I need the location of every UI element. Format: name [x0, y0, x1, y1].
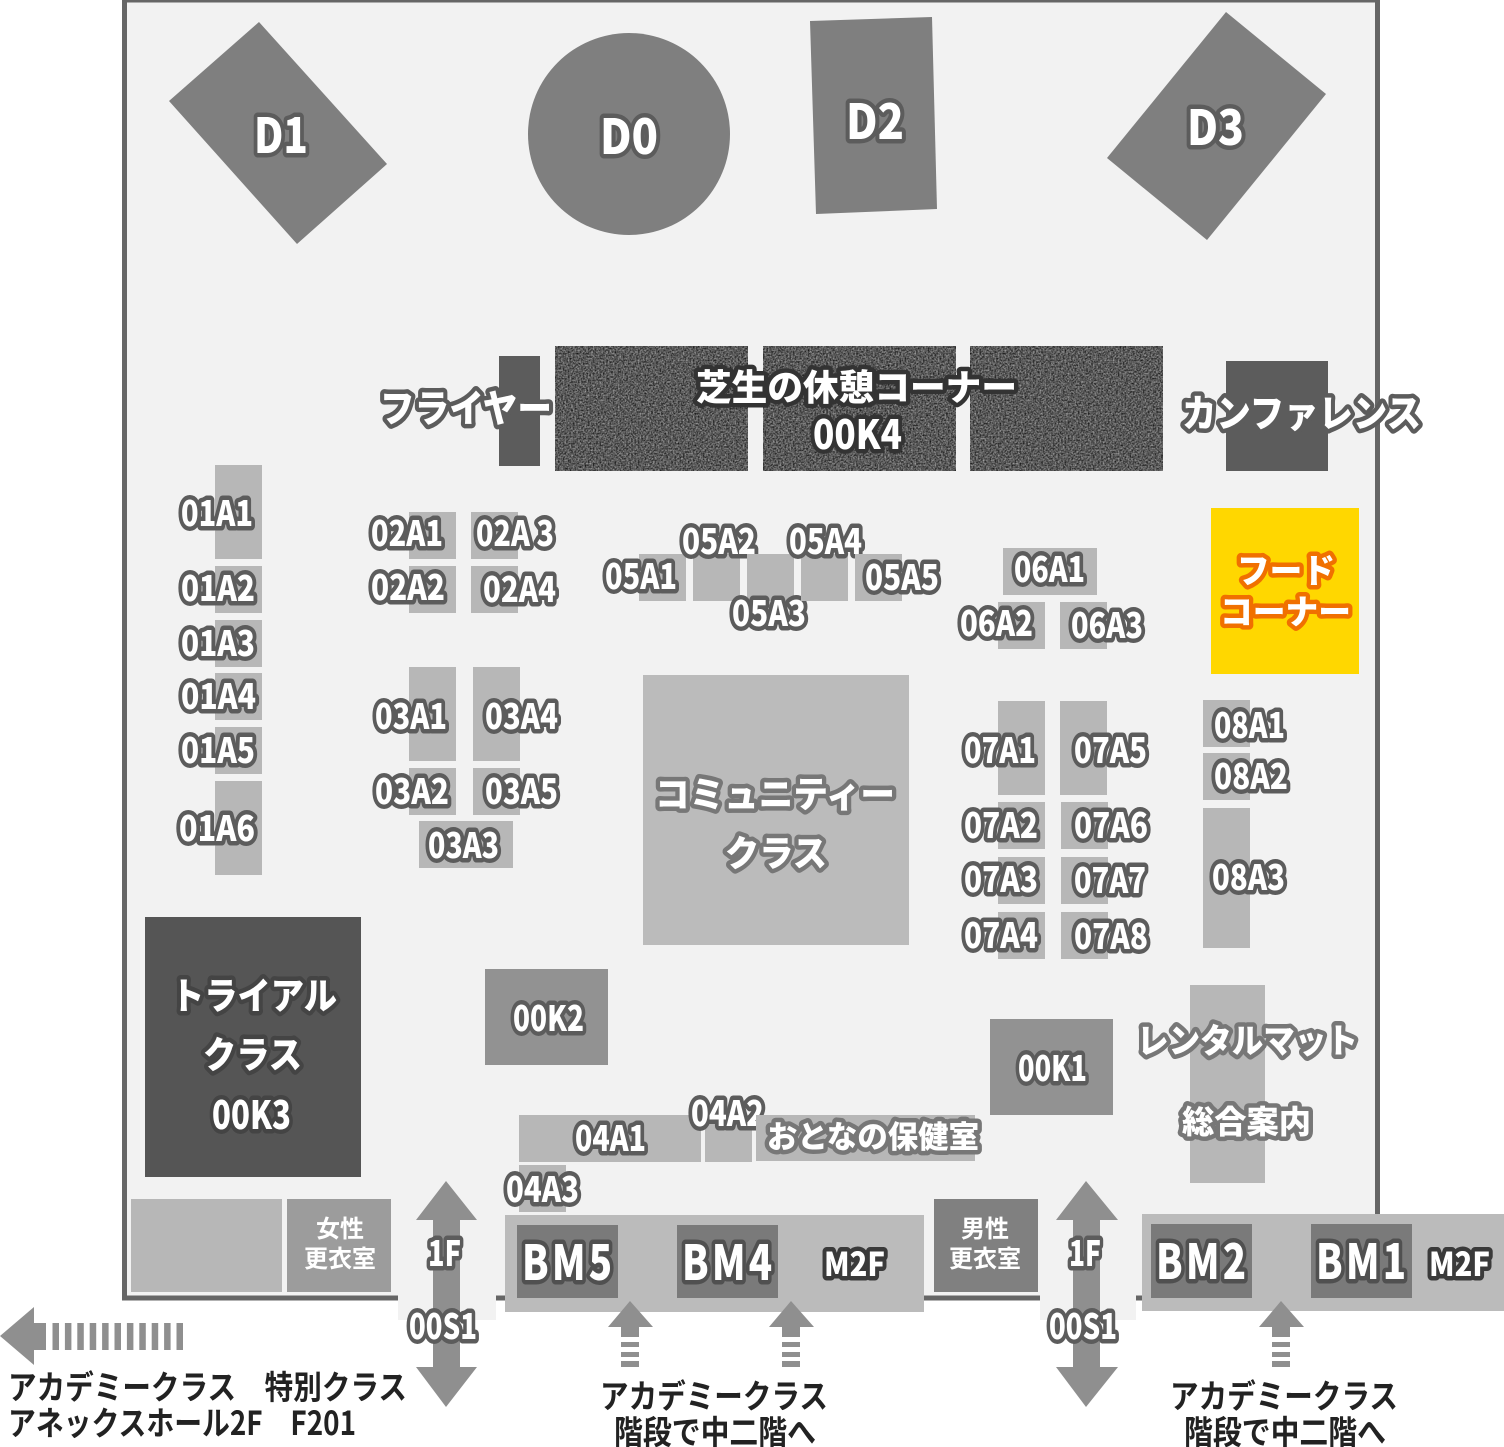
rental mat and information: 総合案内	[1182, 1097, 1311, 1143]
stair opening left	[398, 1290, 496, 1320]
caption: stairs to mezzanine left: アカデミークラス	[600, 1370, 828, 1418]
booth 05A4	[789, 514, 862, 601]
zone D3	[1107, 12, 1326, 240]
booth 01A1	[181, 465, 262, 559]
booth 00K1	[990, 1019, 1113, 1115]
trial class	[145, 917, 361, 1177]
booth 01A2: 01A2	[181, 561, 255, 612]
booth 02A2: 02A2	[371, 560, 445, 611]
booth 03A5: 03A5	[485, 764, 558, 815]
booth 04A2: 04A2	[691, 1086, 764, 1137]
arrow: to annex hall	[0, 1307, 183, 1365]
booth 08A1: 08A1	[1214, 698, 1285, 749]
trial class: クラス	[203, 1025, 302, 1079]
floor frame	[124, 0, 1378, 1298]
booth 03A4: 03A4	[485, 689, 558, 740]
booth 04A3 label: 04A3	[506, 1162, 579, 1213]
booth 02A3: 02A 3	[476, 506, 554, 557]
caption: academy special class: アネックスホール2F F201	[8, 1397, 356, 1445]
booth 05A1: 05A1	[605, 549, 677, 600]
men's changing room: 更衣室	[949, 1239, 1021, 1274]
booth 07A5: 07A5	[1074, 723, 1147, 774]
community class	[643, 675, 909, 945]
unlabeled room	[131, 1199, 282, 1292]
rental mat and information	[1137, 985, 1358, 1183]
men's changing room: 男性	[961, 1209, 1009, 1244]
booth 07A5	[1060, 701, 1147, 795]
conference	[1182, 361, 1421, 471]
booth 00K2: 00K2	[513, 991, 584, 1042]
fryer	[380, 356, 552, 466]
zone D0: D0	[600, 98, 658, 168]
caption: stairs to mezzanine left	[600, 1370, 828, 1447]
community class: クラス	[725, 825, 827, 877]
adult health room: おとなの保健室	[767, 1112, 979, 1157]
booth 07A1: 07A1	[964, 723, 1036, 774]
arrow: stairs 00S1 left: 00S1	[409, 1299, 477, 1350]
women's changing room: 女性	[316, 1209, 364, 1244]
booth 04A2	[691, 1086, 764, 1162]
zone D2	[810, 17, 937, 214]
lawn rest corner	[555, 346, 1163, 471]
booth 05A5: 05A5	[865, 550, 939, 601]
booth 03A1: 03A1	[375, 689, 447, 740]
women's changing room	[287, 1199, 391, 1292]
booth 01A4: 01A4	[181, 669, 256, 720]
trial class: トライアル	[171, 966, 337, 1020]
conference: カンファレンス	[1182, 383, 1421, 438]
booth 07A4: 07A4	[964, 908, 1038, 959]
arrow: stairs 00S1 right: 00S1	[1049, 1299, 1117, 1350]
men's changing room	[934, 1199, 1038, 1292]
booth 04A1: 04A1	[575, 1111, 646, 1162]
food corner: コーナー	[1220, 585, 1351, 634]
food corner: フード	[1237, 544, 1335, 593]
stair opening right	[1040, 1290, 1136, 1320]
arrow: stairs 00S1 left: 1F	[428, 1226, 461, 1277]
zone D1: D1	[254, 97, 308, 167]
booth 07A3: 07A3	[964, 852, 1038, 903]
booth 07A6: 07A6	[1074, 798, 1148, 849]
booth 03A3: 03A3	[428, 818, 499, 869]
trial class: 00K3	[212, 1085, 291, 1141]
mezzanine band right: BM2	[1156, 1224, 1249, 1293]
mezzanine band left: M2F	[824, 1238, 885, 1286]
booth 04A3	[519, 1165, 566, 1212]
booth 01A1: 01A1	[181, 486, 253, 537]
rental mat and information: レンタルマット	[1137, 1014, 1358, 1063]
booth 05A2: 05A2	[682, 514, 756, 565]
zone D1	[169, 22, 387, 244]
zone D3: D3	[1187, 89, 1244, 159]
booth 00K1: 00K1	[1018, 1041, 1087, 1092]
caption: stairs to mezzanine right: アカデミークラス	[1170, 1370, 1398, 1418]
zone D0	[528, 33, 730, 235]
booth 05A3	[732, 554, 806, 637]
mezzanine band right	[1142, 1214, 1504, 1311]
booth 07A1	[964, 701, 1045, 795]
booth 05A4: 05A4	[789, 514, 862, 565]
booth 05A2	[682, 514, 756, 601]
booth 08A2: 08A2	[1214, 749, 1288, 800]
booth 07A8: 07A8	[1074, 909, 1148, 960]
lawn rest corner: 00K4	[813, 403, 902, 461]
booth 02A1: 02A1	[371, 506, 443, 557]
arrow: stairs 00S1 left	[409, 1181, 477, 1407]
mezzanine band left: BM4	[682, 1225, 775, 1294]
arrow: stairs 00S1 right: 1F	[1069, 1226, 1101, 1277]
caption: stairs to mezzanine right	[1170, 1370, 1398, 1447]
arrow: up to BM4	[769, 1301, 814, 1367]
booth 01A6	[179, 781, 262, 875]
booth 01A3: 01A3	[181, 616, 255, 667]
arrow: up to BM5	[608, 1301, 653, 1367]
mezzanine band left: BM5	[522, 1225, 615, 1294]
mezzanine band right: BM1	[1316, 1224, 1409, 1293]
booth 08A3	[1203, 808, 1285, 948]
booth 01A6: 01A6	[179, 801, 255, 852]
caption: academy special class: アカデミークラス 特別クラス	[8, 1361, 407, 1409]
food corner	[1211, 508, 1359, 674]
booth 03A1	[375, 667, 456, 761]
booth 06A1: 06A1	[1014, 542, 1085, 593]
booth 08A3: 08A3	[1212, 850, 1285, 901]
booth 07A2: 07A2	[964, 798, 1038, 849]
booth 03A2: 03A2	[375, 764, 449, 815]
arrow: stairs 00S1 right	[1049, 1181, 1118, 1407]
mezzanine band left	[505, 1215, 924, 1312]
caption: academy special class	[8, 1361, 407, 1445]
booth 04A1	[519, 1111, 701, 1162]
zone D2: D2	[846, 83, 904, 153]
booth 06A3: 06A3	[1071, 598, 1143, 649]
booth 02A4: 02A4	[483, 562, 556, 613]
community class: コミュニティー	[655, 766, 895, 818]
arrow: up to right mezzanine	[1259, 1301, 1304, 1367]
fryer: フライヤー	[380, 378, 552, 433]
booth 05A3: 05A3	[732, 586, 806, 637]
lawn rest corner: 芝生の休憩コーナー	[696, 359, 1017, 411]
booth 03A4	[473, 667, 558, 761]
women's changing room: 更衣室	[304, 1239, 376, 1274]
mezzanine band right: M2F	[1429, 1238, 1490, 1286]
booth 07A7: 07A7	[1074, 853, 1146, 904]
booth 00K2	[485, 969, 608, 1065]
booth 01A5: 01A5	[181, 723, 255, 774]
booth 06A2: 06A2	[960, 596, 1033, 647]
